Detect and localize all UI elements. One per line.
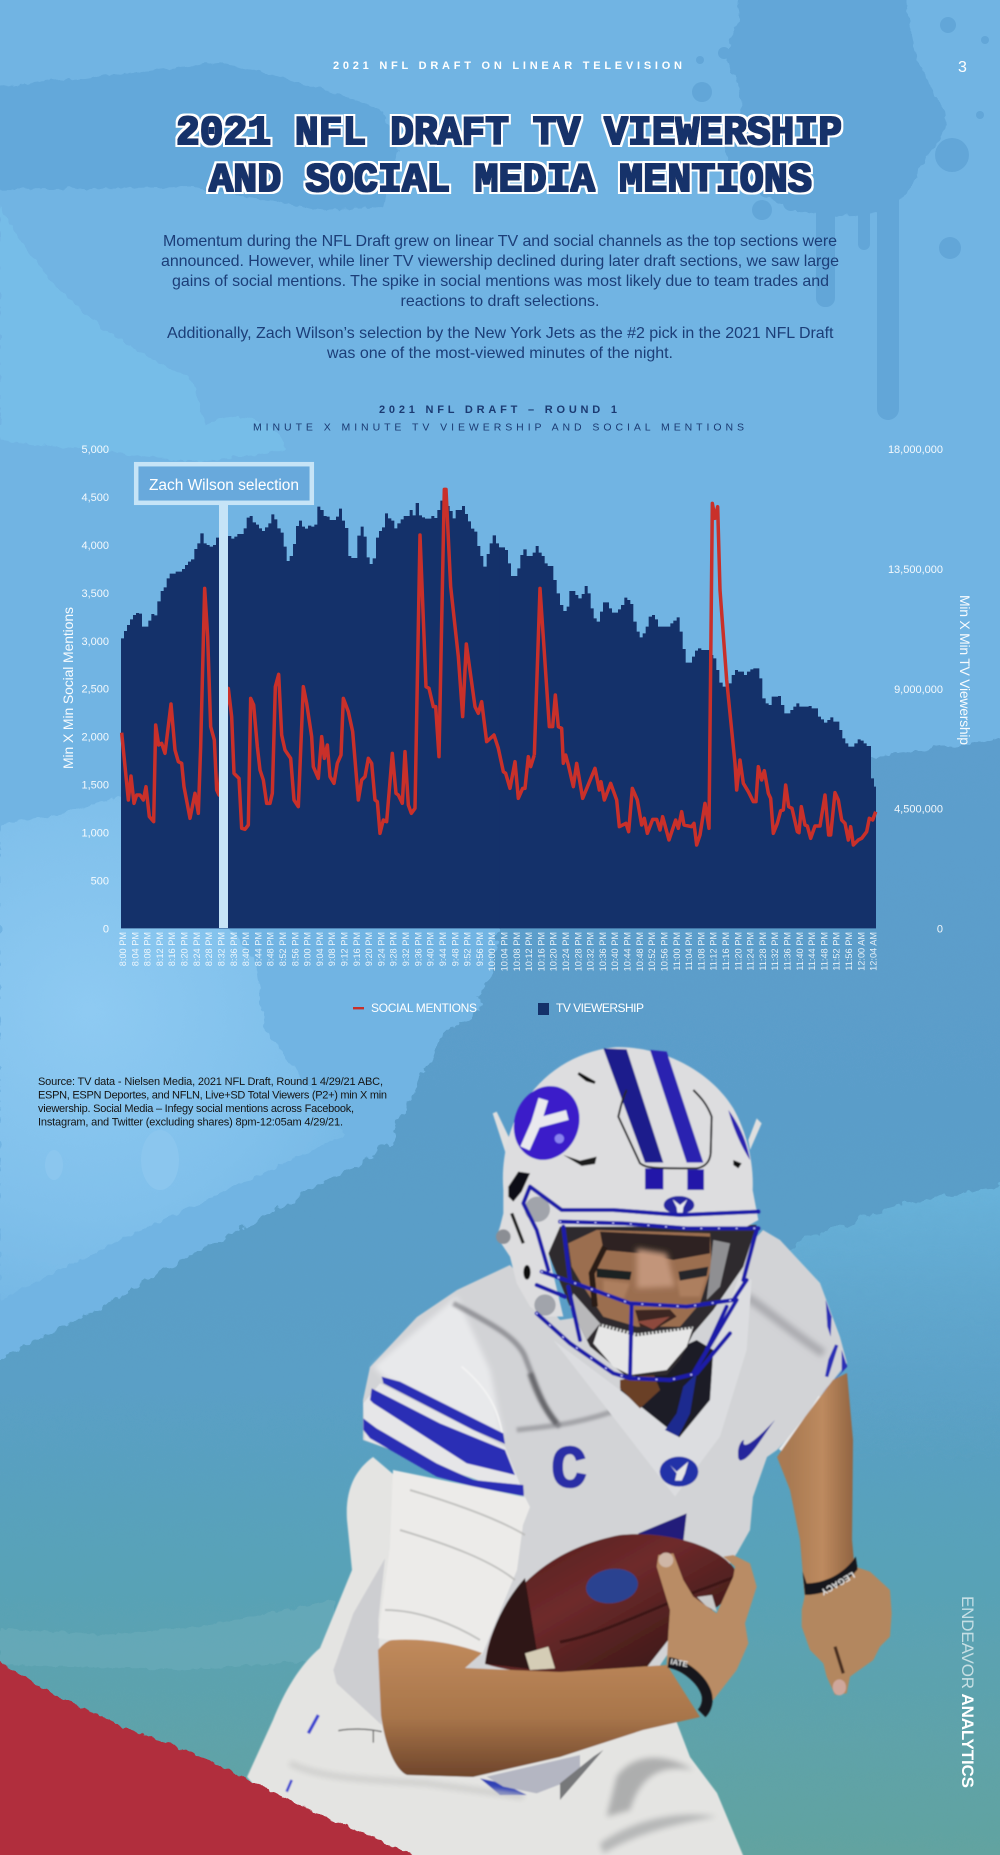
x axis time labels: 10:08 PM [512, 932, 522, 971]
x axis time labels: 8:32 PM [216, 932, 226, 966]
x axis time labels: 8:00 PM [118, 932, 128, 966]
x axis time labels: 9:56 PM [475, 932, 485, 966]
title: AND SOCIAL MEDIA MENTIONS [209, 158, 812, 204]
x axis time labels: 8:36 PM [229, 932, 239, 966]
left axis labels: 2,500 [81, 684, 109, 696]
x axis time labels: 8:24 PM [192, 932, 202, 966]
left axis labels: 4,000 [81, 540, 109, 552]
Endeavor Analytics wordmark: ENDEAVOR ANALYTICS [958, 1596, 977, 1788]
left axis labels: 0 [103, 924, 109, 936]
left axis labels: 4,500 [81, 492, 109, 504]
right arm and fist [777, 1373, 892, 1695]
x axis time labels: 10:36 PM [598, 932, 608, 971]
compression sleeve [378, 1470, 530, 1655]
right axis labels: 4,500,000 [894, 804, 943, 816]
source note: ESPN, ESPN Deportes, and NFLN, Live+SD Total Viewers (P2+) min X min [38, 1090, 387, 1102]
x axis time labels: 9:48 PM [450, 932, 460, 966]
x axis time labels: 10:32 PM [586, 932, 596, 971]
chart heading: MINUTE X MINUTE TV VIEWERSHIP AND SOCIAL MENTIONS [253, 422, 744, 434]
intro text [161, 233, 839, 362]
x axis time labels: 9:52 PM [463, 932, 473, 966]
x axis time labels: 10:28 PM [573, 932, 583, 971]
source note: Instagram, and Twitter (excluding shares) 8pm-12:05am 4/29/21. [38, 1116, 343, 1128]
chart heading: 2021 NFL DRAFT – ROUND 1 [379, 404, 617, 416]
x axis time labels: 10:16 PM [536, 932, 546, 971]
x axis time labels: 11:16 PM [721, 932, 731, 971]
player photo: quarterback illustration [247, 1047, 892, 1855]
x axis time labels: 10:12 PM [524, 932, 534, 971]
jersey [363, 1230, 847, 1680]
x axis time labels: 11:56 PM [844, 932, 854, 971]
x axis time labels: 9:24 PM [376, 932, 386, 966]
left forearm and hand [378, 1553, 757, 1777]
right axis labels: 18,000,000 [888, 444, 943, 456]
x axis time labels: 8:12 PM [155, 932, 165, 966]
pants and undershirt [247, 1457, 745, 1855]
x axis time labels: 11:24 PM [746, 932, 756, 971]
x axis time labels: 9:08 PM [327, 932, 337, 966]
section header: 2021 NFL DRAFT ON LINEAR TELEVISION [333, 60, 682, 72]
title [176, 111, 842, 204]
x axis time labels: 11:00 PM [672, 932, 682, 971]
source note: Source: TV data - Nielsen Media, 2021 NFL Draft, Round 1 4/29/21 ABC, [38, 1076, 383, 1088]
left axis labels: 2,000 [81, 732, 109, 744]
x axis time labels: 8:44 PM [253, 932, 263, 966]
left axis title: Min X Min Social Mentions [60, 607, 76, 769]
x axis time labels: 9:16 PM [352, 932, 362, 966]
left axis labels: 1,000 [81, 828, 109, 840]
x axis time labels: 10:20 PM [549, 932, 559, 971]
x axis time labels: 9:36 PM [413, 932, 423, 966]
x axis time labels: 9:44 PM [438, 932, 448, 966]
x axis time labels: 11:08 PM [696, 932, 706, 971]
x axis time labels: 8:48 PM [266, 932, 276, 966]
callout: Zach Wilson selection [136, 464, 312, 928]
x axis time labels: 8:04 PM [130, 932, 140, 966]
jersey: C [551, 1438, 587, 1506]
right axis title: Min X Min TV Viewership [957, 595, 973, 745]
x axis time labels: 11:44 PM [807, 932, 817, 971]
x axis time labels: 8:08 PM [143, 932, 153, 966]
legend: TV VIEWERSHIP [556, 1001, 644, 1015]
intro text: was one of the most-viewed minutes of the night. [326, 345, 673, 362]
left axis labels: 1,500 [81, 780, 109, 792]
x axis time labels: 11:32 PM [770, 932, 780, 971]
x axis time labels: 10:52 PM [647, 932, 657, 971]
x axis time labels: 9:20 PM [364, 932, 374, 966]
left forearm and hand: IATE [670, 1657, 689, 1669]
chart heading [253, 404, 744, 434]
x axis time labels [118, 932, 879, 971]
page number: 3 [958, 59, 967, 76]
intro text: Momentum during the NFL Draft grew on linear TV and social channels as the top sections were [163, 233, 837, 250]
source note: viewership. Social Media – Infegy social mentions across Facebook, [38, 1103, 354, 1115]
x axis time labels: 9:00 PM [303, 932, 313, 966]
football [485, 1534, 735, 1676]
x axis time labels: 11:12 PM [709, 932, 719, 971]
source note [38, 1076, 387, 1128]
x axis time labels: 11:36 PM [782, 932, 792, 971]
x axis time labels: 8:52 PM [278, 932, 288, 966]
right arm and fist: LEGACY [819, 1570, 857, 1597]
left axis labels: 500 [91, 876, 109, 888]
intro text: announced. However, while liner TV viewership declined during later draft sections, we saw large [161, 253, 839, 270]
x axis time labels: 11:40 PM [795, 932, 805, 971]
x axis time labels: 10:44 PM [622, 932, 632, 971]
x axis time labels: 10:48 PM [635, 932, 645, 971]
x axis time labels: 8:40 PM [241, 932, 251, 966]
x axis time labels: 8:28 PM [204, 932, 214, 966]
x axis time labels: 12:00 AM [856, 932, 866, 971]
left axis labels: 3,000 [81, 636, 109, 648]
x axis time labels: 9:28 PM [389, 932, 399, 966]
x axis time labels: 10:00 PM [487, 932, 497, 971]
x axis time labels: 10:04 PM [500, 932, 510, 971]
x axis time labels: 12:04 AM [869, 932, 879, 971]
title: 2021 NFL DRAFT TV VIEWERSHIP [176, 111, 842, 157]
x axis time labels: 10:24 PM [561, 932, 571, 971]
x axis time labels: 9:04 PM [315, 932, 325, 966]
x axis time labels: 9:40 PM [426, 932, 436, 966]
x axis time labels: 9:32 PM [401, 932, 411, 966]
left axis labels [81, 444, 109, 936]
left axis labels: 3,500 [81, 588, 109, 600]
chart: TV viewership area [121, 501, 876, 928]
x axis time labels: 11:48 PM [819, 932, 829, 971]
x axis time labels: 8:20 PM [180, 932, 190, 966]
right axis labels [888, 444, 943, 936]
chart: social mentions line [122, 489, 876, 845]
x axis time labels: 11:20 PM [733, 932, 743, 971]
red torn paper corner [0, 1648, 420, 1855]
x axis time labels: 9:12 PM [340, 932, 350, 966]
right axis labels: 9,000,000 [894, 684, 943, 696]
callout: Zach Wilson selection: Zach Wilson selection [149, 477, 299, 494]
x axis time labels: 10:56 PM [660, 932, 670, 971]
x axis time labels: 11:52 PM [832, 932, 842, 971]
legend: SOCIAL MENTIONS [371, 1001, 477, 1015]
helmet [493, 1047, 762, 1380]
left axis labels: 5,000 [81, 444, 109, 456]
x axis time labels: 8:16 PM [167, 932, 177, 966]
right axis labels: 13,500,000 [888, 564, 943, 576]
x axis time labels: 10:40 PM [610, 932, 620, 971]
intro text: reactions to draft selections. [400, 293, 600, 310]
x axis time labels: 8:56 PM [290, 932, 300, 966]
legend [353, 1001, 644, 1015]
intro text: gains of social mentions. The spike in social mentions was most likely due to team trades and [172, 273, 829, 290]
x axis time labels: 11:28 PM [758, 932, 768, 971]
right axis labels: 0 [937, 924, 943, 936]
intro text: Additionally, Zach Wilson’s selection by the New York Jets as the #2 pick in the 2021 NFL Draft [167, 325, 834, 342]
x axis time labels: 11:04 PM [684, 932, 694, 971]
